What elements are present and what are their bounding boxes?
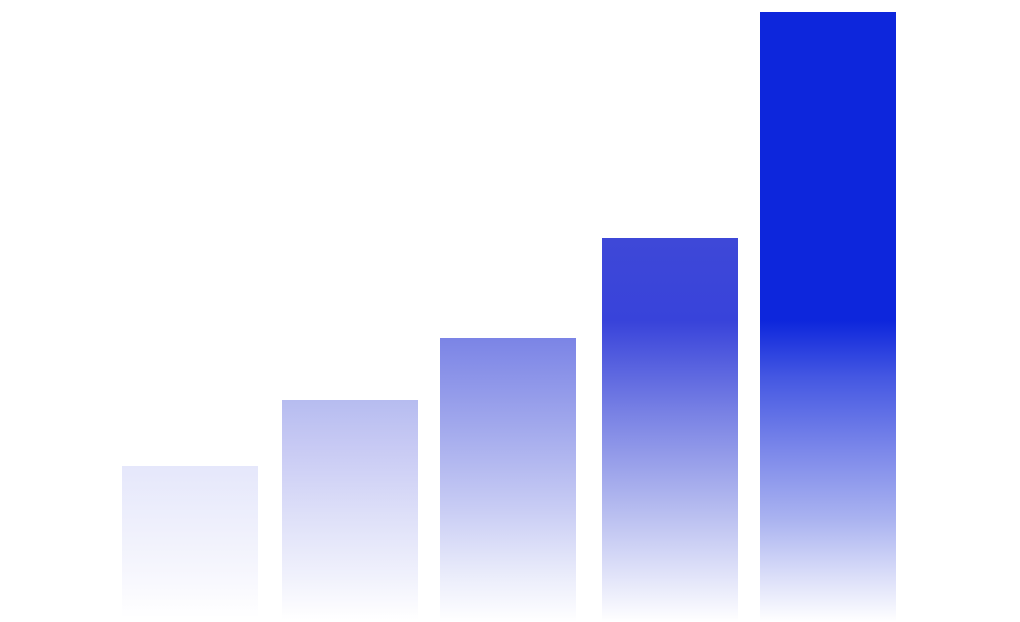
bar 4 bbox=[602, 238, 738, 622]
bar 5 bbox=[760, 12, 896, 622]
bar 1 bbox=[122, 466, 258, 622]
bar 3 bbox=[440, 338, 576, 622]
bar 2 bbox=[282, 400, 418, 622]
